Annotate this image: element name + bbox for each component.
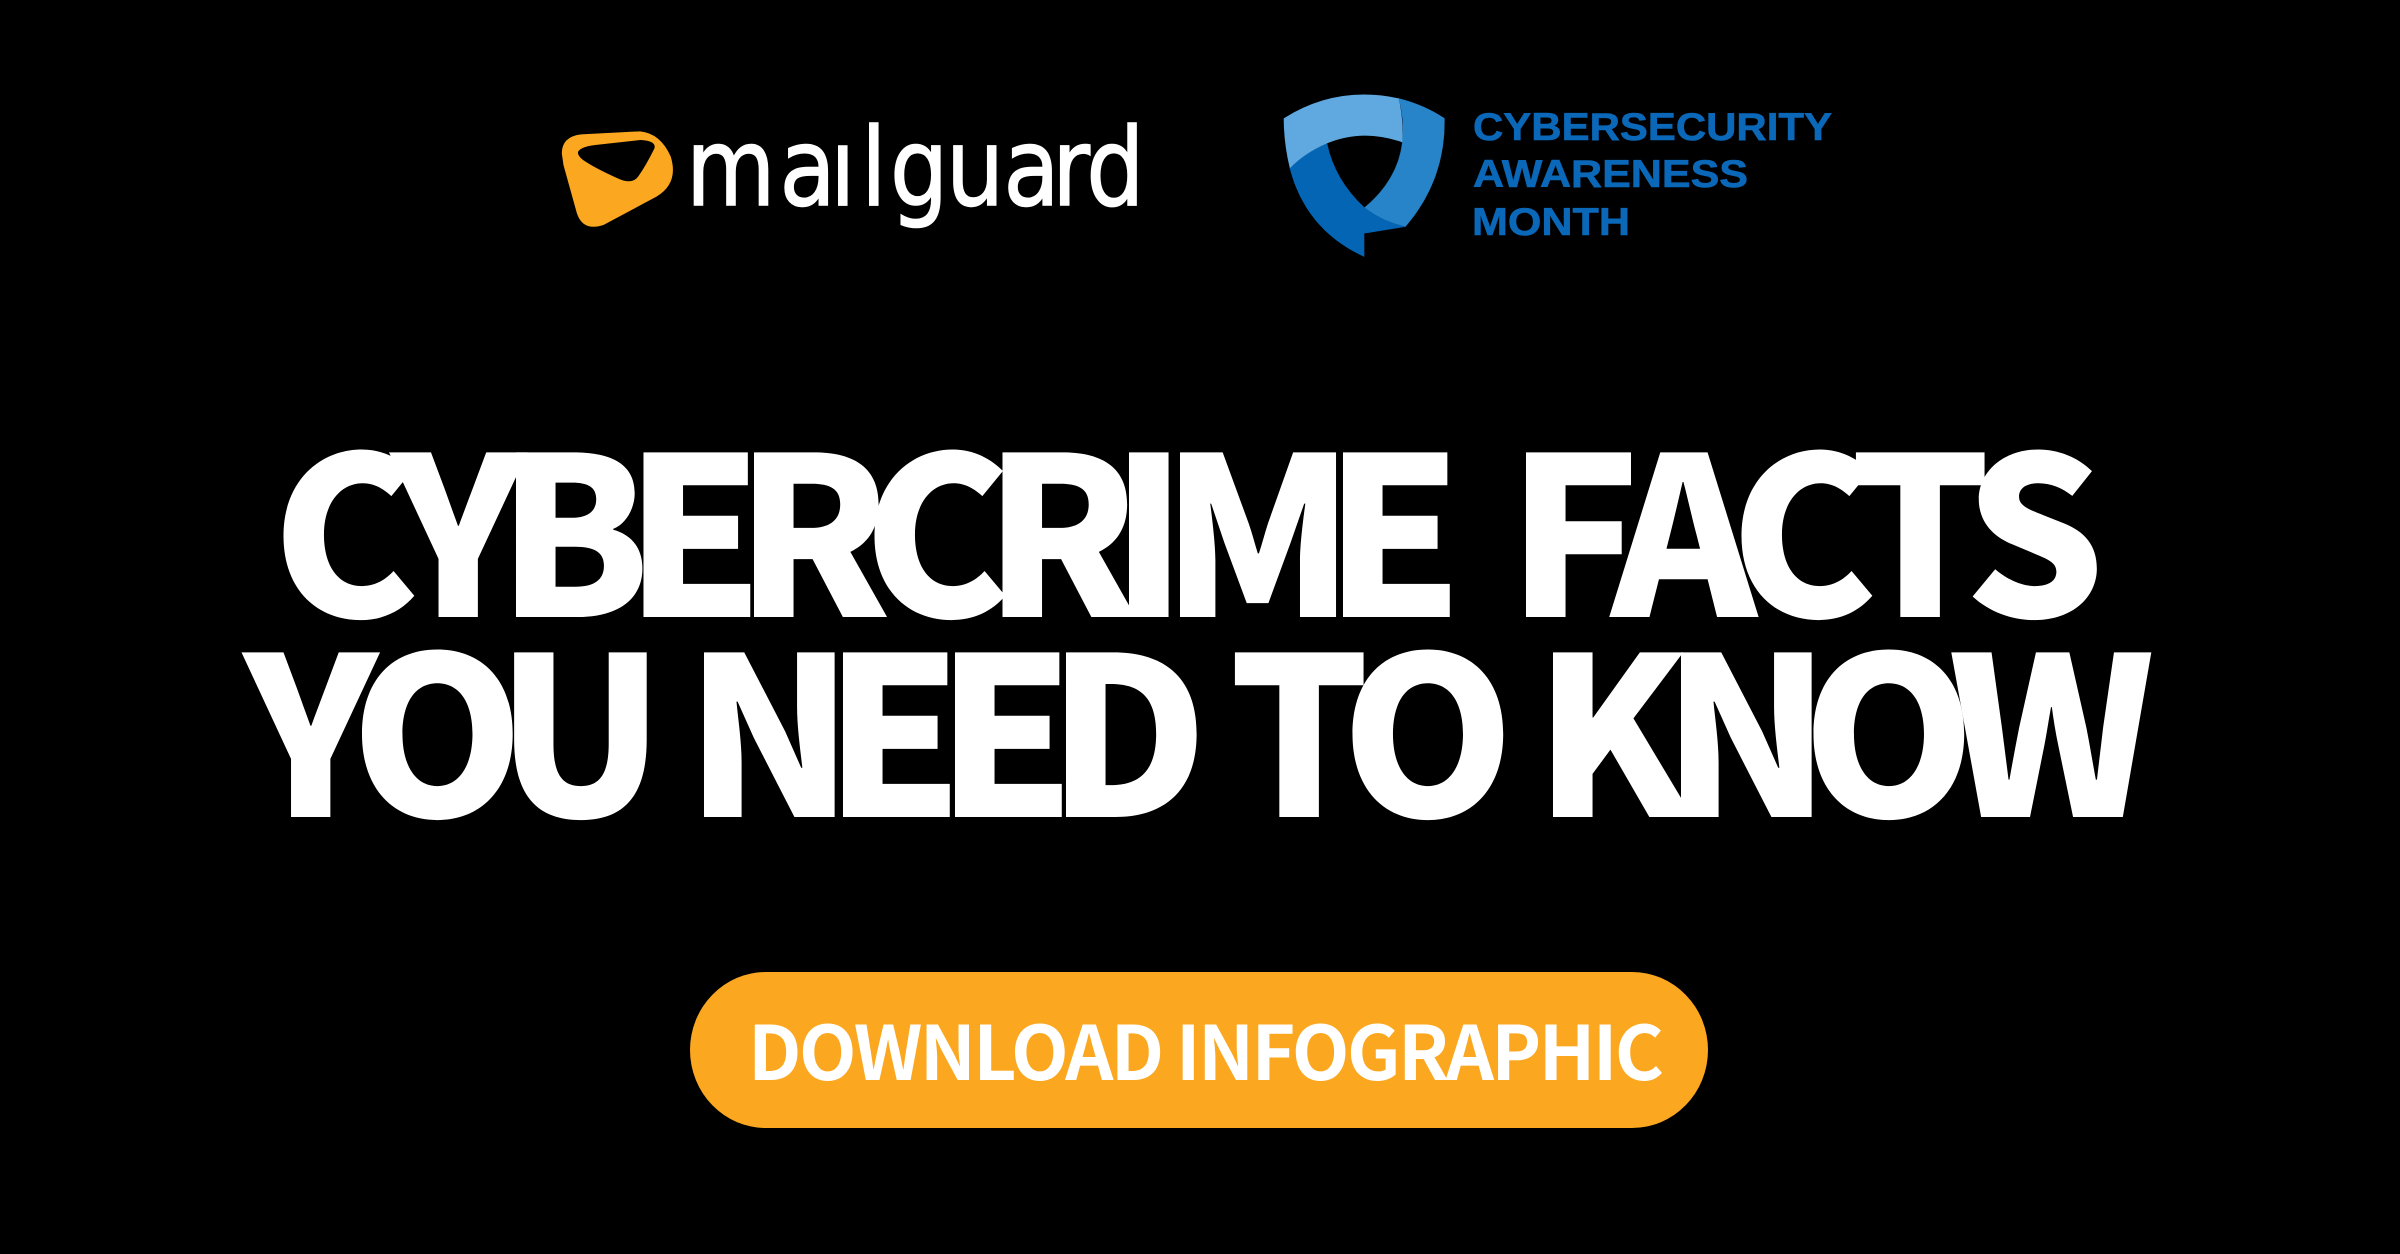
button: download infographic: [690, 972, 1708, 1128]
title: CYBERCRIME: [272, 361, 1463, 681]
title: TO: [1228, 561, 1515, 881]
title: YOU: [242, 561, 665, 881]
icon: shield speech bubble: [1284, 95, 1444, 257]
text: campaign name: MONTH: [1472, 201, 1630, 244]
title: FACTS: [1507, 361, 2105, 681]
title: NEED: [685, 561, 1208, 881]
text: campaign name: AWARENESS: [1473, 153, 1748, 196]
text: campaign name: [1472, 106, 1832, 244]
text: campaign name: CYBERSECURITY: [1473, 106, 1832, 149]
icon: MailGuard envelope mark: [562, 131, 673, 227]
wordmark: mailguard: mailguard: [686, 105, 1145, 231]
logo: Cybersecurity Awareness Month: [1284, 95, 1832, 257]
title: KNOW: [1534, 561, 2155, 881]
button: download infographic: DOWNLOAD INFOGRAPHIC: [748, 993, 1664, 1102]
title: [242, 361, 2155, 881]
logo: MailGuard: [562, 105, 1145, 231]
